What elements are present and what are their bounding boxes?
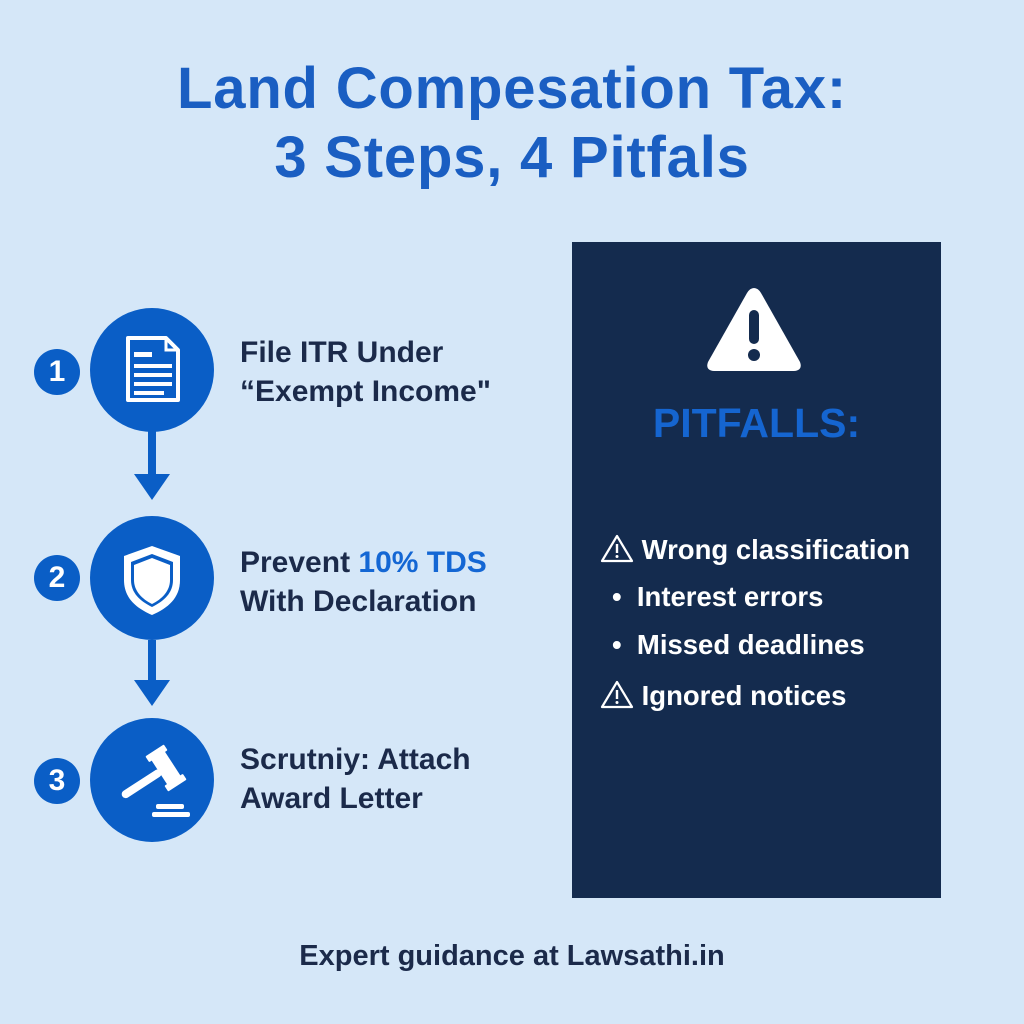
badge 1: 1: [49, 355, 65, 388]
step 2 text: Prevent 10% TDS: [240, 546, 487, 579]
title: 3 Steps, 4 Pitfals: [274, 125, 750, 190]
panel: pitfalls: [572, 242, 941, 898]
step 1: [34, 308, 491, 432]
item: wrong classification: Wrong classification: [642, 534, 910, 565]
step 3: [34, 718, 471, 842]
item: interest errors: • Interest errors: [612, 581, 823, 612]
badge 3: [34, 758, 80, 804]
step 2: [34, 516, 487, 640]
badge 2: [34, 555, 80, 601]
icon: document: [90, 308, 214, 432]
title: Land Compesation Tax:: [177, 56, 847, 121]
badge 3: 3: [49, 764, 65, 797]
icon: gavel: [90, 718, 214, 842]
badge 1: [34, 349, 80, 395]
step 1 text: File ITR Under: [240, 336, 443, 369]
title: [177, 56, 847, 190]
step 3 text: Award Letter: [240, 782, 423, 815]
icon: shield: [90, 516, 214, 640]
step 1 text: [240, 336, 491, 408]
step 1 text: “Exempt Income": [240, 375, 491, 408]
badge 2: 2: [49, 561, 65, 594]
item: ignored notices: Ignored notices: [642, 680, 846, 711]
step 2 text: [240, 546, 487, 618]
arrow 2: [134, 640, 170, 706]
arrow 1: [134, 432, 170, 500]
pitfall list: [600, 534, 910, 711]
step 2 text: With Declaration: [240, 585, 476, 618]
pitfalls heading: PITFALLS:: [653, 400, 860, 446]
step 3 text: [240, 743, 471, 815]
footer: Expert guidance at Lawsathi.in: [299, 940, 725, 972]
step 3 text: Scrutniy: Attach: [240, 743, 471, 776]
icon: warning triangle: [707, 288, 801, 371]
item: missed deadlines: • Missed deadlines: [612, 629, 865, 660]
